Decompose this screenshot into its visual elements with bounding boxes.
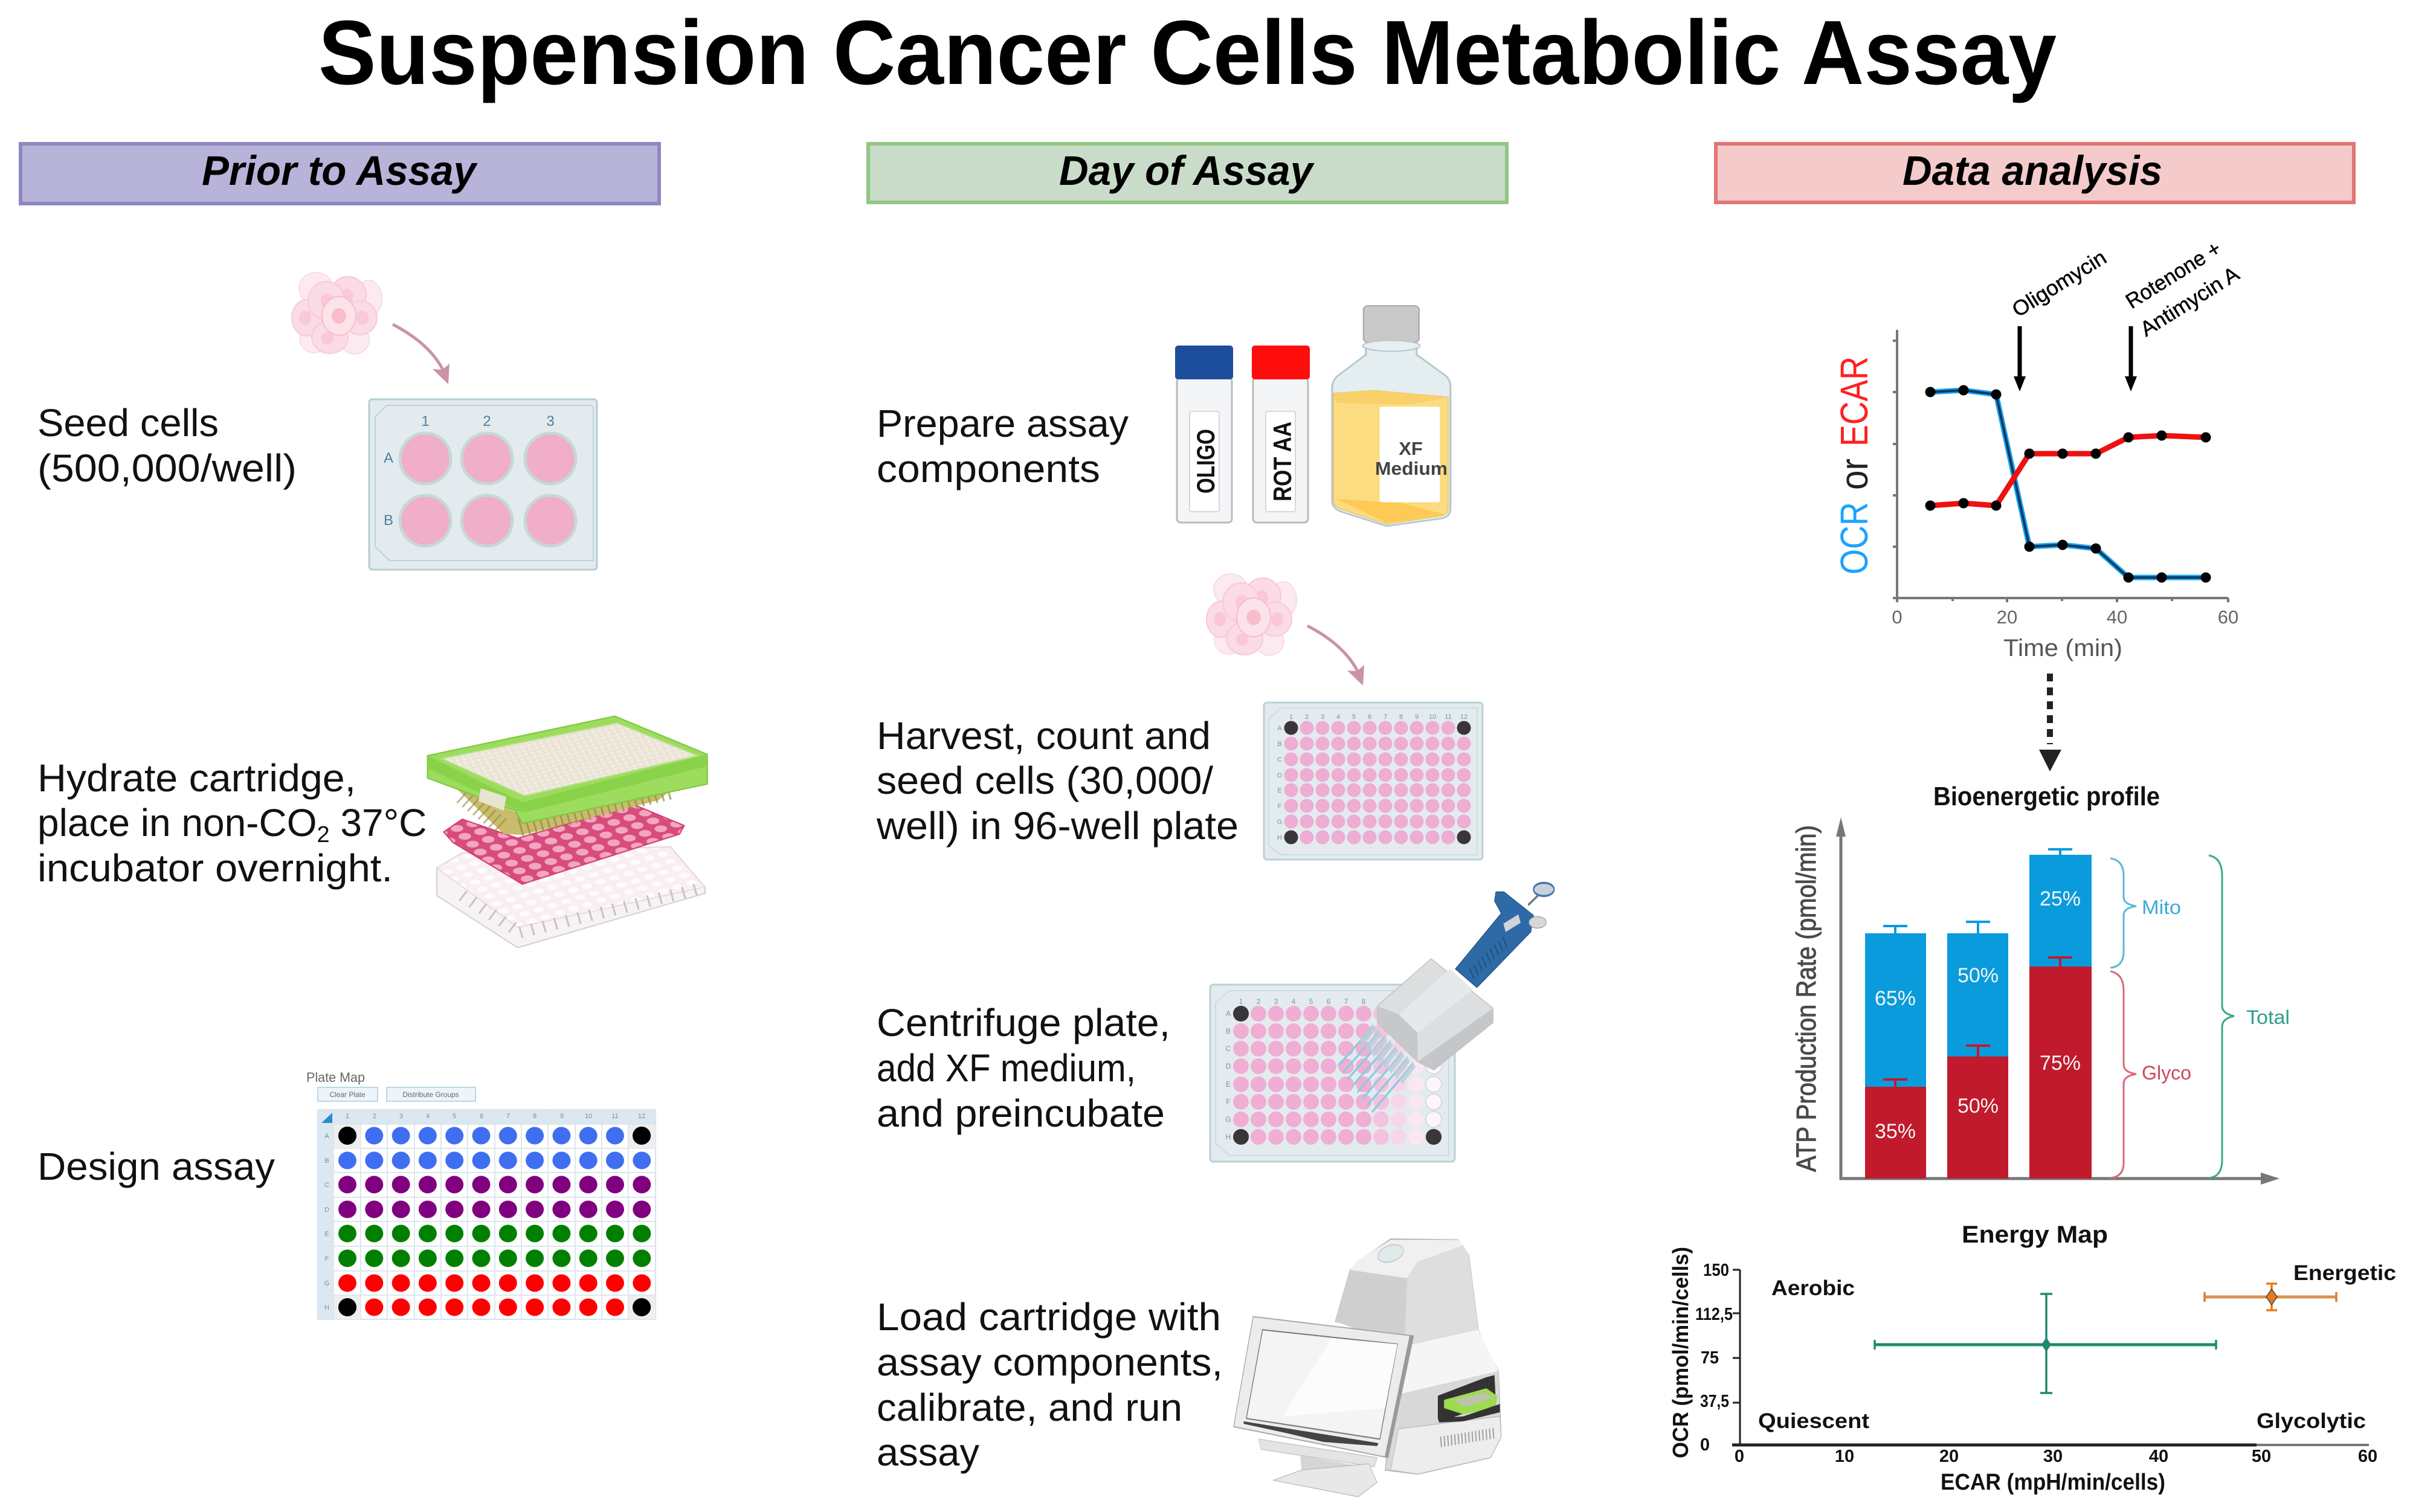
chart: bioenergetic profile: 25% — [2040, 887, 2081, 910]
icon: multichannel pipette — [1338, 883, 1554, 1112]
icon: ROT AA vial: ROT AA — [1268, 422, 1297, 501]
icon: 6-well plate: 1 — [421, 413, 430, 429]
icon: 96-well plate: B — [1277, 741, 1282, 748]
icon: 96-well plate: 2 — [1305, 713, 1309, 721]
icon: cell cluster with arrow (day of assay) — [1207, 574, 1364, 686]
icon: OLIGO vial: OLIGO — [1191, 429, 1220, 494]
chart: bioenergetic profile: 50% — [1957, 964, 1999, 987]
icon: 6-well plate: B — [384, 512, 393, 529]
panel header: Data analysis: Data analysis — [1903, 147, 2162, 194]
label: Rotenone + Antimycin A with arrow: Rotenone + — [2122, 236, 2225, 314]
label: Oligomycin with arrow — [2008, 245, 2110, 391]
plate map: B — [324, 1157, 329, 1165]
chart: energy map — [1668, 1221, 2396, 1495]
chart: bioenergetic profile: 50% — [1957, 1095, 1999, 1118]
icon: 96-well plate being filled: 7 — [1344, 997, 1348, 1006]
icon: 96-well plate being filled: A — [1226, 1009, 1231, 1018]
icon: 96-well plate: H — [1277, 834, 1282, 841]
chart: OCR or ECAR time course: 60 — [2218, 606, 2238, 628]
step: design assay text: Design assay — [37, 1145, 275, 1188]
icon: 96-well plate being filled: C — [1226, 1044, 1231, 1053]
chart: bioenergetic profile — [1791, 782, 2290, 1185]
panel header: Prior to Assay: Prior to Assay — [202, 147, 478, 194]
chart: energy map: Glycolytic — [2257, 1409, 2366, 1433]
chart: energy map: 0 — [1700, 1435, 1710, 1455]
chart: energy map: 75 — [1701, 1348, 1719, 1368]
icon: cell cluster with arrow — [292, 272, 449, 384]
plate map: 3 — [399, 1113, 403, 1120]
chart: energy map: Energetic — [2293, 1261, 2396, 1285]
icon: 96-well plate being filled: 2 — [1257, 997, 1261, 1006]
heading: Energy Map: Energy Map — [1962, 1221, 2108, 1248]
icon: 96-well plate: F — [1278, 803, 1282, 810]
plate map: E — [324, 1231, 329, 1238]
chart: energy map: 60 — [2358, 1447, 2377, 1466]
step: prepare assay components text — [877, 402, 1129, 491]
plate map: Clear Plate — [329, 1090, 366, 1099]
chart: energy map: 112,5 — [1695, 1305, 1733, 1324]
icon: 6-well plate: A — [384, 450, 393, 466]
chart: bioenergetic profile: Glyco — [2142, 1062, 2191, 1084]
step: load cartridge text: assay — [877, 1430, 979, 1474]
chart: energy map: OCR (pmol/min/cells) — [1668, 1247, 1693, 1458]
chart: bioenergetic profile: 35% — [1875, 1120, 1916, 1143]
panel header: Day of Assay — [868, 144, 1507, 202]
plate map: Distribute Groups — [402, 1090, 459, 1099]
step: hydrate cartridge text: Hydrate cartridge, — [37, 756, 356, 800]
icon: 96-well plate: 7 — [1384, 713, 1387, 721]
icon: 96-well plate: 3 — [1321, 713, 1324, 721]
icon: 96-well plate: 4 — [1336, 713, 1340, 721]
step: load cartridge text: calibrate, and run — [877, 1386, 1182, 1429]
icon: XF medium bottle: XF — [1399, 438, 1423, 459]
chart: OCR or ECAR time course: 20 — [1997, 606, 2017, 628]
chart: energy map: 40 — [2149, 1447, 2168, 1466]
step: seed cells text: (500,000/well) — [37, 446, 297, 490]
icon: 96-well plate: 11 — [1445, 713, 1452, 721]
icon: 96-well plate being filled: 5 — [1309, 997, 1313, 1006]
chart: OCR or ECAR time course — [1832, 330, 2238, 661]
chart: OCR or ECAR time course: 0 — [1892, 606, 1903, 628]
chart: OCR or ECAR time course: Time (min) — [2003, 635, 2122, 661]
icon: 96-well plate: 9 — [1415, 713, 1419, 721]
chart: bioenergetic profile: 75% — [2040, 1052, 2081, 1075]
icon: 96-well plate: 12 — [1460, 713, 1468, 721]
panel header: Day of Assay: Day of Assay — [1059, 147, 1315, 194]
chart: energy map: 50 — [2252, 1447, 2271, 1466]
chart: OCR or ECAR time course: 40 — [2107, 606, 2127, 628]
step: centrifuge text: Centrifuge plate, — [877, 1001, 1170, 1044]
arrow: dotted down arrow — [2039, 674, 2061, 771]
step: hydrate cartridge text — [37, 756, 427, 890]
chart: energy map: 10 — [1835, 1447, 1854, 1466]
plate map: G — [324, 1280, 329, 1287]
icon: ROT AA vial — [1252, 346, 1310, 523]
icon: XF medium bottle: Medium — [1375, 458, 1448, 479]
step: load cartridge text: assay components, — [877, 1340, 1223, 1384]
icon: 96-well plate: 10 — [1429, 713, 1436, 721]
chart: energy map: 150 — [1703, 1261, 1729, 1280]
label: Rotenone + Antimycin A with arrow — [2122, 236, 2244, 391]
icon: 96-well plate being filled: 8 — [1362, 997, 1366, 1006]
chart: OCR or ECAR time course: or — [1832, 458, 1876, 490]
icon: 96-well plate being filled: 6 — [1327, 997, 1331, 1006]
icon: 96-well plate being filled: H — [1226, 1133, 1231, 1141]
step: hydrate cartridge text: 2 — [317, 822, 330, 848]
chart: energy map: 37,5 — [1700, 1392, 1729, 1411]
icon: 96-well plate being filled — [1210, 985, 1455, 1162]
plate map: H — [324, 1304, 329, 1311]
icon: 6-well plate — [369, 399, 597, 570]
icon: 96-well plate: 6 — [1368, 713, 1371, 721]
plate map: D — [324, 1206, 329, 1214]
plate map: 2 — [373, 1113, 376, 1120]
icon: 96-well plate — [1264, 703, 1483, 860]
icon: 96-well plate: 1 — [1289, 713, 1293, 721]
plate map: A — [324, 1133, 329, 1140]
chart: bioenergetic profile: ATP Production Rate (pmol/min) — [1791, 825, 1822, 1172]
chart: energy map: 20 — [1939, 1447, 1959, 1466]
chart: energy map: Quiescent — [1758, 1409, 1869, 1433]
label: Rotenone + Antimycin A with arrow: Antimycin A — [2136, 262, 2244, 341]
heading: Bioenergetic profile: Bioenergetic profile — [1933, 782, 2160, 811]
step: load cartridge text — [877, 1295, 1223, 1474]
step: seed cells text — [37, 401, 297, 490]
plate map: 4 — [426, 1113, 430, 1120]
icon: 96-well plate being filled: B — [1226, 1027, 1231, 1035]
icon: 96-well plate being filled: D — [1226, 1062, 1231, 1070]
plate map: 1 — [346, 1113, 349, 1120]
step: prepare assay components text: Prepare assay — [877, 402, 1129, 445]
icon: 96-well plate: D — [1277, 772, 1282, 779]
plate map: 6 — [480, 1113, 483, 1120]
icon: 6-well plate: 2 — [483, 413, 491, 429]
step: harvest and seed text: well) in 96-well plate — [876, 804, 1239, 848]
step: hydrate cartridge text: incubator overnight. — [37, 846, 393, 890]
label: Oligomycin with arrow: Oligomycin — [2008, 245, 2110, 322]
plate map: 5 — [453, 1113, 456, 1120]
icon: OLIGO vial — [1175, 346, 1233, 523]
chart: OCR or ECAR time course: ECAR — [1832, 356, 1876, 446]
step: hydrate cartridge text: place in non-CO — [37, 801, 317, 844]
plate map: 11 — [611, 1113, 619, 1120]
step: centrifuge text: and preincubate — [877, 1092, 1165, 1135]
icon: 96-well plate being filled: G — [1225, 1115, 1231, 1124]
step: harvest and seed text — [876, 714, 1239, 848]
icon: 96-well plate: 5 — [1352, 713, 1356, 721]
icon: 96-well plate being filled: F — [1226, 1098, 1231, 1106]
icon: 96-well plate: C — [1277, 756, 1282, 764]
step: centrifuge text — [877, 1001, 1170, 1135]
icon: 96-well plate being filled: 1 — [1239, 997, 1243, 1006]
icon: 96-well plate: A — [1277, 725, 1282, 732]
chart: energy map: 30 — [2043, 1447, 2063, 1466]
chart: bioenergetic profile: Mito — [2142, 896, 2181, 918]
step: prepare assay components text: components — [877, 447, 1100, 491]
plate map: 7 — [506, 1113, 510, 1120]
step: hydrate cartridge text: 37°C — [330, 801, 427, 844]
icon: 96-well plate being filled: 3 — [1274, 997, 1278, 1006]
icon: Seahorse cartridge stack — [428, 716, 707, 948]
plate map: F — [325, 1255, 329, 1263]
chart: energy map: 0 — [1735, 1447, 1744, 1466]
icon: 96-well plate being filled: 4 — [1292, 997, 1296, 1006]
icon: 96-well plate being filled: E — [1226, 1080, 1231, 1089]
chart: energy map: Aerobic — [1771, 1276, 1855, 1300]
plate map: 12 — [638, 1113, 645, 1120]
icon: 96-well plate: G — [1277, 819, 1282, 826]
step: harvest and seed text: Harvest, count and — [877, 714, 1211, 758]
icon: Seahorse analyzer — [1234, 1239, 1501, 1497]
step: harvest and seed text: seed cells (30,000/ — [877, 759, 1213, 802]
plate map: C — [324, 1182, 329, 1189]
chart: energy map: ECAR (mpH/min/cells) — [1941, 1470, 2165, 1495]
step: centrifuge text: add XF medium, — [877, 1046, 1136, 1090]
panel header: Prior to Assay — [21, 144, 659, 204]
plate map: Plate Map — [306, 1070, 365, 1085]
icon: 96-well plate: E — [1277, 787, 1282, 794]
plate map: 9 — [560, 1113, 564, 1120]
icon: 6-well plate: 3 — [546, 413, 555, 429]
chart: OCR or ECAR time course: OCR — [1832, 502, 1876, 574]
plate map: 8 — [533, 1113, 536, 1120]
panel header: Data analysis — [1716, 144, 2354, 202]
title: Suspension Cancer Cells Metabolic Assay — [318, 1, 2057, 103]
plate map — [306, 1070, 656, 1319]
step: seed cells text: Seed cells — [37, 401, 219, 445]
step: load cartridge text: Load cartridge with — [877, 1295, 1221, 1339]
chart: bioenergetic profile: Total — [2246, 1006, 2290, 1028]
plate map: 10 — [585, 1113, 592, 1120]
chart: bioenergetic profile: 65% — [1875, 987, 1916, 1010]
icon: XF medium bottle — [1332, 306, 1451, 526]
icon: 96-well plate: 8 — [1399, 713, 1403, 721]
